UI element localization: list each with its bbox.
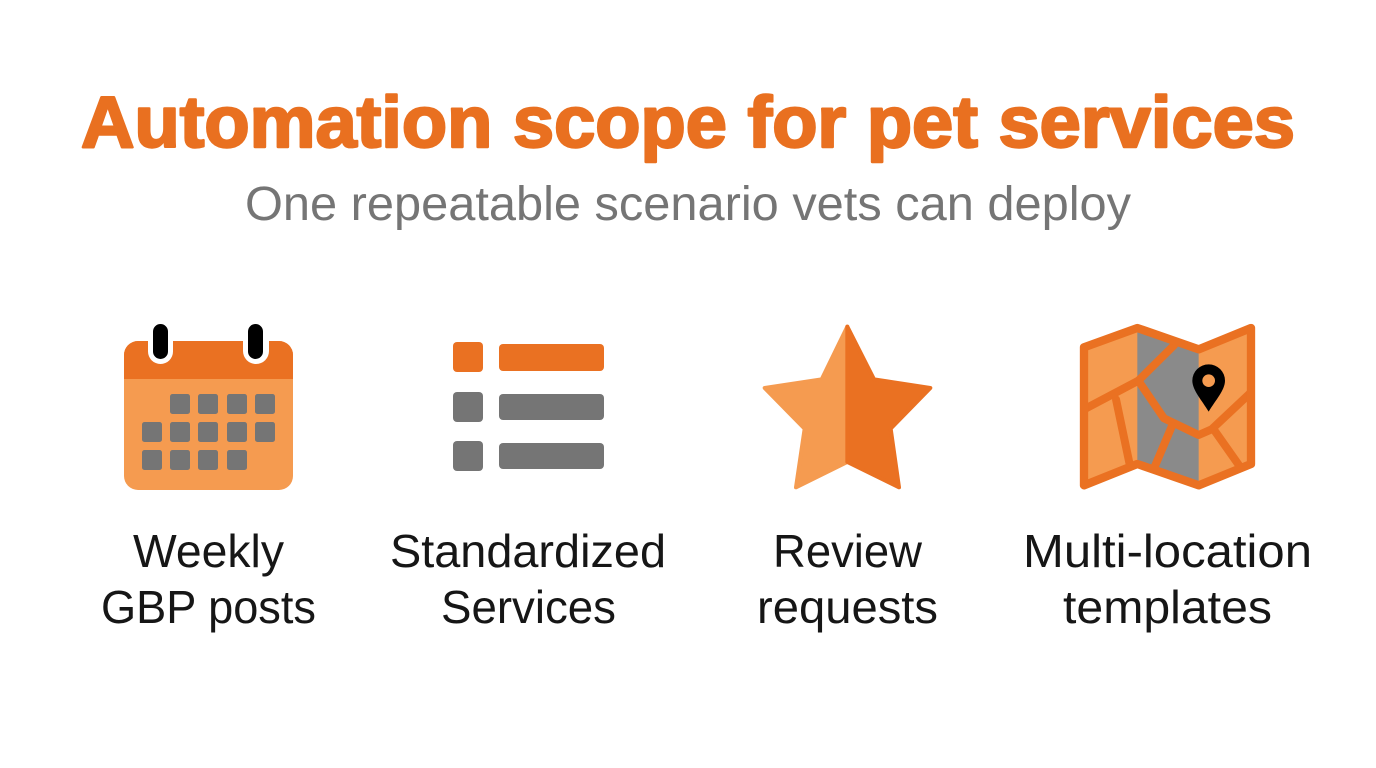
label: multi-location templates: Multi-location [1023,525,1312,577]
label: multi-location templates: templates [1063,581,1272,633]
label: multi-location templates [1023,525,1312,633]
icon: star [765,327,930,487]
label: weekly GBP posts [101,525,316,633]
label: review requests: requests [757,581,938,633]
subtitle: One repeatable scenario vets can deploy [245,178,1131,231]
icon: calendar [124,318,293,490]
title: Automation scope for pet services [81,83,1295,163]
label: review requests: Review [773,525,923,577]
label: review requests [757,525,938,633]
label: standardized services: Services [441,581,616,633]
icon: map with pin [1084,328,1251,485]
icon: service list [453,342,604,471]
label: weekly GBP posts: GBP posts [101,581,316,633]
label: standardized services [390,525,666,633]
label: standardized services: Standardized [390,525,666,577]
label: weekly GBP posts: Weekly [133,525,284,577]
